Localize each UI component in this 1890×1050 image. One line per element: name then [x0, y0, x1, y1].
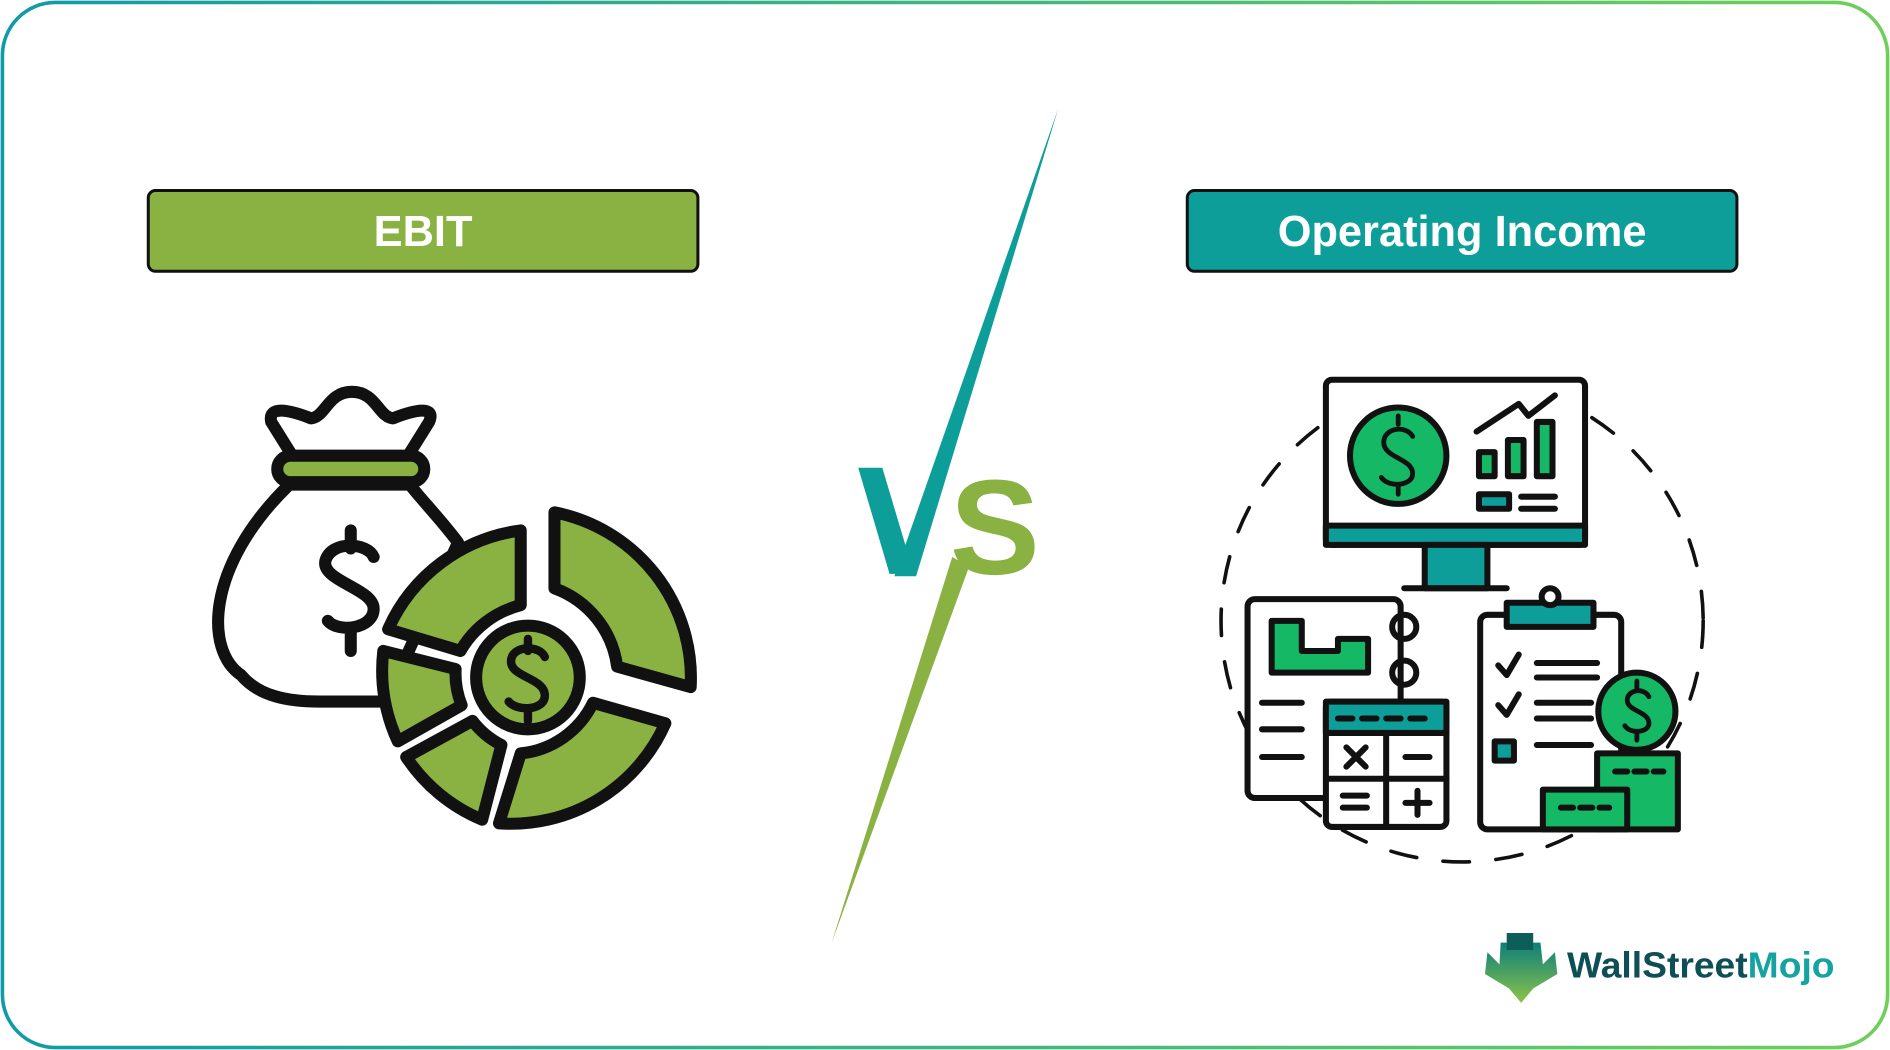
heading: EBIT: [148, 191, 698, 271]
logo: WallStreetMojo: WallStreetMojo: [1567, 945, 1835, 986]
VS divider: [832, 109, 1058, 943]
icon: money bag with pie chart: [218, 392, 691, 824]
icon: operating income dashboard: [1221, 380, 1703, 862]
heading: EBIT: EBIT: [374, 208, 473, 256]
heading: Operating Income: [1187, 191, 1737, 271]
logo: WallStreetMojo: [1485, 933, 1835, 1003]
heading: Operating Income: Operating Income: [1278, 208, 1646, 256]
VS divider: S: [950, 452, 1040, 603]
